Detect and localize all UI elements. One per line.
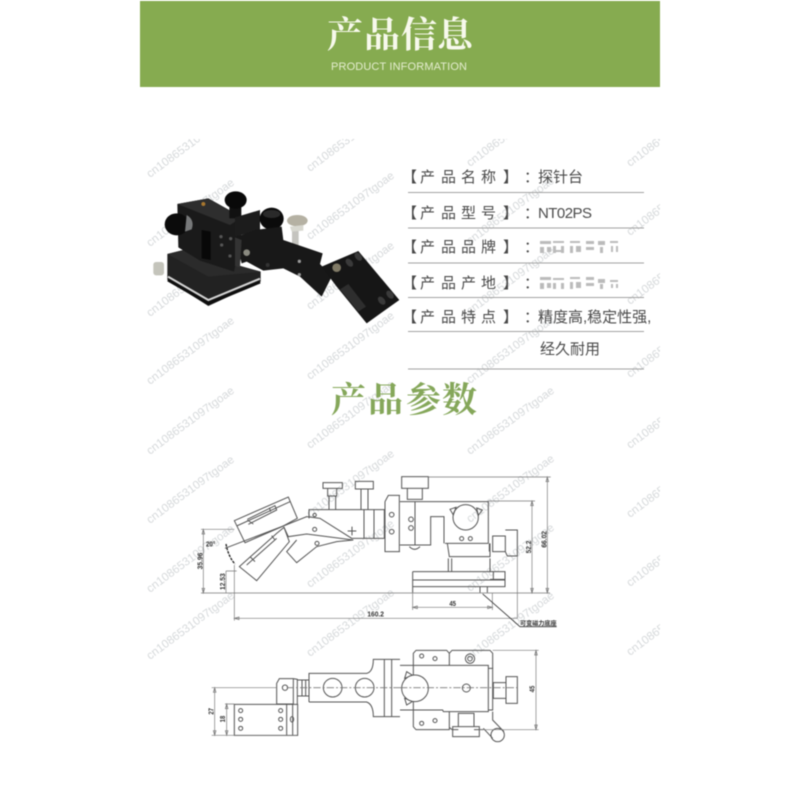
middle knob [260, 208, 284, 230]
table row dividers [408, 192, 644, 369]
side view right half [400, 477, 557, 627]
watermark pattern: cn1086531097tgoae [624, 234, 717, 307]
watermark pattern: cn1086531097tgoae [624, 516, 717, 589]
panel: product information table [402, 166, 651, 369]
watermark pattern: cn1086531097tgoae [464, 313, 557, 386]
row: product features: 【产品特点】： [402, 306, 539, 327]
watermark pattern: cn1086531097tgoae [304, 309, 397, 382]
dimension: 18: 18 [218, 716, 227, 722]
watermark pattern: cn1086531097tgoae [464, 384, 557, 457]
dimension: 35.96: 35.96 [195, 553, 204, 569]
watermark pattern: cn1086531097tgoae [304, 517, 397, 590]
dimension: 66.02: 66.02 [539, 531, 548, 548]
dimension: 20 degrees: 20° [206, 540, 215, 549]
row: product model: NT02PS [538, 205, 592, 222]
watermark pattern [148, 138, 660, 659]
dimension: 27: 27 [207, 708, 216, 715]
left knob [165, 213, 189, 235]
dimension: 45: 45 [449, 599, 456, 608]
silver side knob [153, 262, 164, 275]
row: product brand, value obscured [402, 236, 618, 257]
silver thumb screw [292, 228, 299, 248]
watermark pattern: cn1086531097tgoae [144, 589, 237, 662]
row: product features: 精度高,稳定性强, [538, 309, 651, 326]
dimension: 45: 45 [528, 686, 537, 692]
clamp block [235, 210, 260, 237]
row: product origin, value obscured: 【产品产地】： [402, 272, 539, 293]
top knob [229, 205, 241, 218]
panel: header banner [140, 1, 660, 87]
top view left half [207, 659, 400, 735]
watermark pattern: cn1086531097tgoae [624, 96, 717, 169]
watermark pattern: cn1086531097tgoae [624, 378, 717, 451]
watermark pattern: cn1086531097tgoae [144, 453, 237, 526]
watermark pattern: cn1086531097tgoae [304, 378, 397, 451]
watermark pattern: cn1086531097tgoae [144, 176, 237, 249]
dimension: 12.53: 12.53 [218, 573, 227, 590]
watermark pattern: cn1086531097tgoae [144, 314, 237, 387]
heading: product parameters: 产品参数 [331, 373, 477, 423]
base plate [167, 250, 261, 306]
row: product origin, value obscured [402, 272, 618, 293]
watermark pattern: cn1086531097tgoae [464, 174, 557, 247]
title: 产品信息 [327, 7, 475, 58]
stage body [177, 198, 242, 272]
watermark pattern: cn1086531097tgoae [464, 589, 557, 662]
probe mount plate [322, 251, 399, 323]
dimension: 52.2: 52.2 [524, 541, 533, 553]
callout: variable magnetic base: 可变磁力底座 [520, 618, 557, 627]
row: product brand, value obscured: 【产品品牌】： [402, 236, 539, 257]
watermark pattern: cn1086531097tgoae [144, 246, 237, 319]
top view right half [400, 650, 539, 742]
row: product name: 探针台 [538, 166, 583, 187]
watermark pattern: cn1086531097tgoae [304, 239, 397, 312]
watermark pattern: cn1086531097tgoae [624, 447, 717, 520]
subtitle: PRODUCT INFORMATION [331, 61, 467, 73]
watermark pattern: cn1086531097tgoae [144, 107, 237, 180]
watermark pattern: cn1086531097tgoae [304, 101, 397, 174]
product photo: probe station [153, 191, 399, 323]
watermark pattern: cn1086531097tgoae [464, 244, 557, 317]
watermark pattern: cn1086531097tgoae [464, 96, 557, 169]
watermark pattern: cn1086531097tgoae [464, 452, 557, 525]
watermark pattern: cn1086531097tgoae [624, 585, 717, 658]
technical drawing: top view [207, 650, 539, 742]
row: product features: 经久耐用 [540, 341, 600, 358]
watermark pattern: cn1086531097tgoae [304, 169, 397, 242]
row: product name: 【产品名称】： [402, 166, 539, 187]
row: product features [402, 306, 651, 358]
dimension: 160.2: 160.2 [367, 610, 384, 619]
watermark pattern: cn1086531097tgoae [304, 586, 397, 659]
watermark pattern: cn1086531097tgoae [624, 165, 717, 238]
watermark pattern: cn1086531097tgoae [464, 521, 557, 594]
row: product model: 【产品型号】： [402, 202, 539, 223]
watermark pattern: cn1086531097tgoae [624, 307, 717, 380]
technical drawing: side view [195, 477, 557, 627]
side view left half [195, 481, 400, 621]
probe arm [235, 227, 332, 297]
watermark pattern: cn1086531097tgoae [144, 522, 237, 595]
watermark pattern: cn1086531097tgoae [144, 384, 237, 457]
watermark pattern: cn1086531097tgoae [304, 447, 397, 520]
